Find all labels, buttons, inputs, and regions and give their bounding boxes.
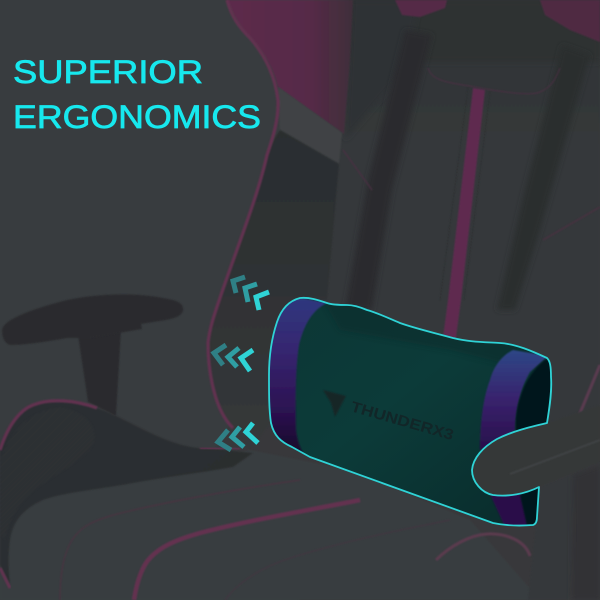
chevron 2 <box>228 348 239 367</box>
seat left piping <box>0 401 97 450</box>
gaming chair backrest <box>208 0 600 600</box>
chevron 1 <box>233 277 245 293</box>
central backrest column <box>215 0 600 600</box>
post shadow <box>572 465 600 600</box>
back to seat piping <box>200 448 240 449</box>
right purple band <box>480 350 548 450</box>
chevron 2 <box>232 427 244 447</box>
armrest post <box>528 470 585 600</box>
center magenta stripe <box>442 88 485 345</box>
left purple band <box>270 298 326 452</box>
wing piping <box>208 0 278 428</box>
title line 2: ERGONOMICS <box>13 99 261 135</box>
chevron 3 <box>241 350 253 371</box>
stripe stitching <box>440 88 490 300</box>
seat cushion <box>0 450 540 600</box>
lumbar pillow <box>260 290 560 530</box>
title <box>13 54 261 135</box>
headrest right strap <box>540 0 600 42</box>
right piping <box>578 365 600 418</box>
chevron arrows top <box>233 277 269 310</box>
grey band <box>278 87 342 164</box>
seat stitching <box>60 480 300 600</box>
pillow interior <box>270 298 550 525</box>
carbon texture <box>0 407 95 540</box>
chevron 2 <box>245 284 257 302</box>
seat <box>0 401 540 600</box>
side bolster top shadow <box>345 0 420 140</box>
seat corner piping <box>0 568 10 588</box>
chevron 3 <box>256 292 269 310</box>
center panel stitching <box>428 68 560 94</box>
title line 1: SUPERIOR <box>13 54 203 90</box>
lower end cap <box>520 488 538 524</box>
brand logo emblem <box>323 390 346 417</box>
chevron arrows middle <box>214 345 253 371</box>
carbon side bolster <box>0 401 253 585</box>
side bolster stitching <box>343 150 372 190</box>
right end cap <box>515 360 550 430</box>
left dark channel <box>345 30 432 310</box>
right dark channel <box>497 45 590 310</box>
chevron 1 <box>214 345 226 365</box>
seat front stitching <box>225 520 450 600</box>
pillow cyan outline <box>269 298 551 526</box>
chevron 3 <box>246 423 258 443</box>
chevron 1 <box>218 430 231 450</box>
armrest highlight <box>510 440 600 474</box>
right armrest <box>472 405 600 600</box>
lower right bolster piping <box>543 207 600 240</box>
lower purple band <box>490 494 527 524</box>
front right piping <box>436 534 530 560</box>
armrest pad <box>2 294 183 345</box>
armrest post <box>78 330 121 416</box>
teal pillow body <box>295 299 548 524</box>
left armrest <box>2 294 183 416</box>
pillow top shading <box>352 328 496 358</box>
headrest shadow <box>345 0 600 62</box>
armrest pad <box>472 405 600 496</box>
seat main piping <box>134 500 360 600</box>
headrest magenta straps <box>395 0 447 17</box>
mesh side panel <box>208 130 339 450</box>
chevron arrows bottom <box>218 423 258 450</box>
magenta wing <box>227 0 353 134</box>
brand logo text: THUNDERX3 <box>349 399 455 444</box>
